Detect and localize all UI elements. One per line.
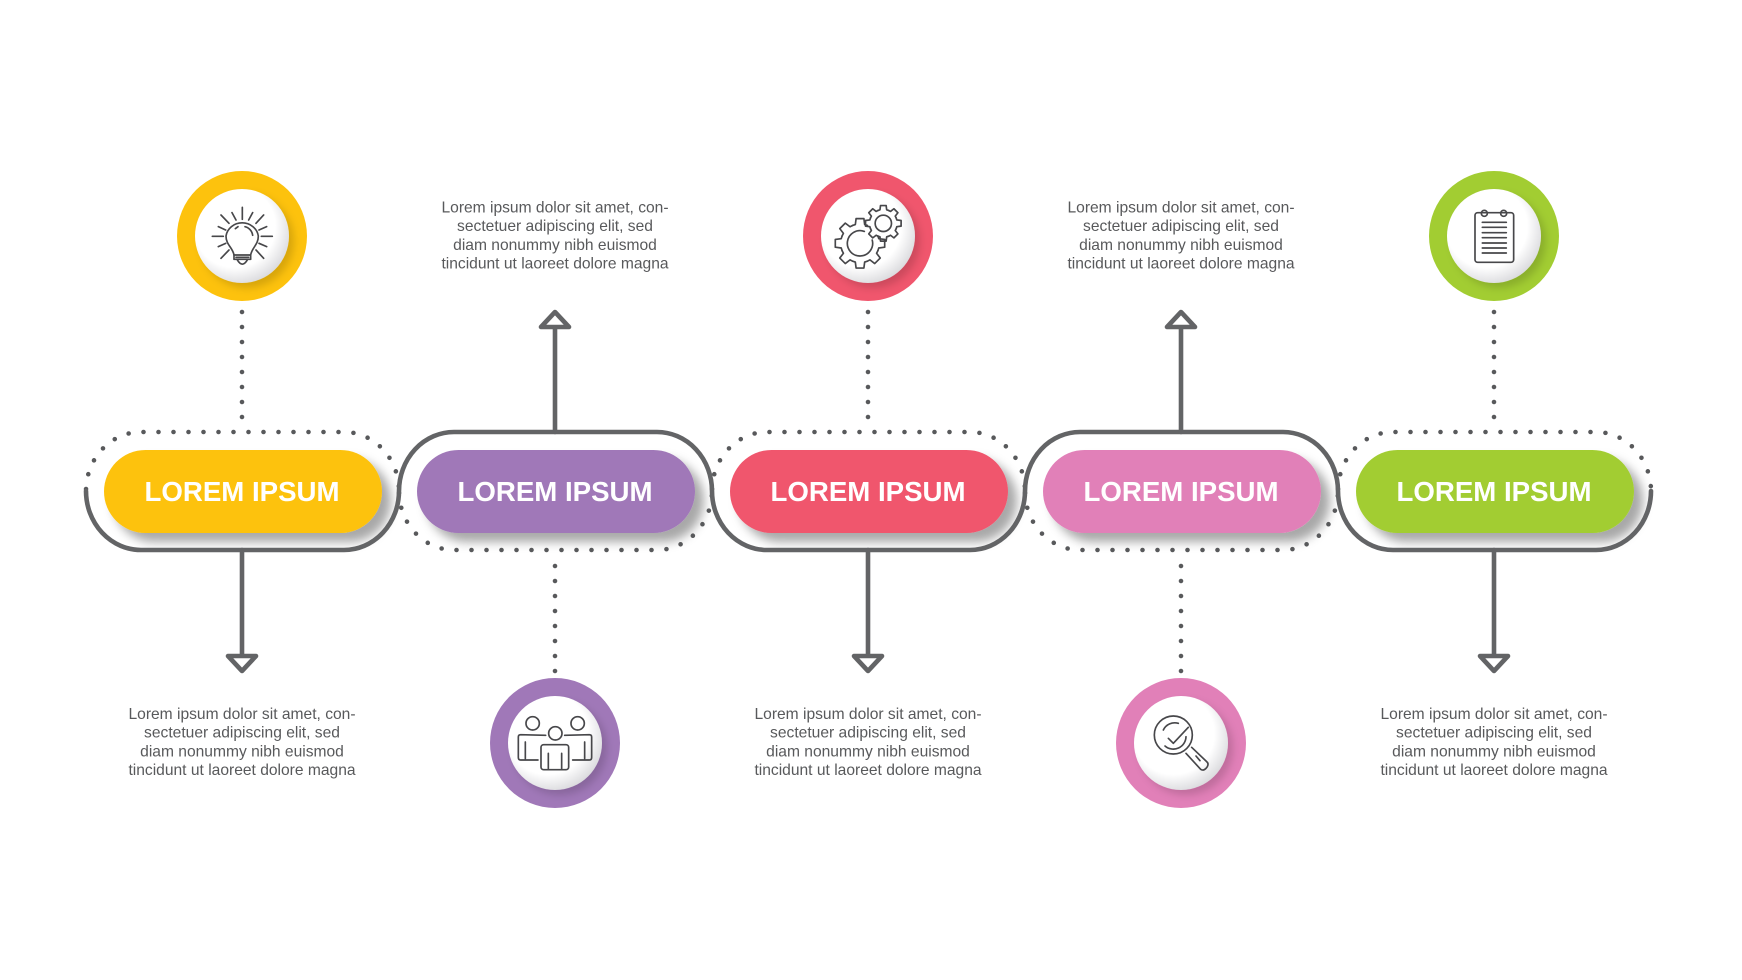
step 3 label pill: LOREM IPSUM: [770, 476, 966, 507]
text block: step 1: tincidunt ut laoreet dolore magna: [128, 762, 356, 779]
text block: step 4: Lorem ipsum dolor sit amet, con-: [1067, 200, 1295, 216]
icon badge: team: [490, 678, 620, 808]
text block: step 2: tincidunt ut laoreet dolore magna: [441, 256, 669, 273]
step 2 label pill: LOREM IPSUM: [458, 476, 652, 507]
text block: step 1: diam nonummy nibh euismod: [140, 743, 344, 760]
text block: step 4: sectetuer adipiscing elit, sed: [1083, 218, 1279, 235]
icon: gears: [835, 206, 901, 268]
connector dots: step 3: [866, 312, 870, 420]
text block: step 1: Lorem ipsum dolor sit amet, con-: [128, 706, 356, 723]
text block: step 3: tincidunt ut laoreet dolore magna: [754, 762, 982, 779]
arrow down: step 3: [854, 550, 882, 671]
connector dots: step 2: [553, 566, 557, 674]
icon badge: gears: [803, 171, 933, 301]
step 4 label pill: LOREM IPSUM: [1084, 476, 1278, 507]
text block: step 3: sectetuer adipiscing elit, sed: [770, 725, 966, 742]
text block: step 5: diam nonummy nibh euismod: [1392, 743, 1596, 760]
arrow down: step 5: [1480, 550, 1508, 671]
connector dots: step 1: [240, 312, 244, 420]
icon badge: light bulb: [177, 171, 307, 301]
text block: step 2: sectetuer adipiscing elit, sed: [457, 218, 653, 235]
arrow down: step 1: [228, 550, 256, 671]
text block: step 5: Lorem ipsum dolor sit amet, con-: [1380, 706, 1608, 723]
step 2 label pill: [417, 450, 695, 533]
step 5 label pill: [1356, 450, 1634, 533]
step 1 label pill: [104, 450, 382, 533]
icon: light bulb: [212, 207, 272, 264]
icon: team of people: [518, 717, 592, 770]
step 5 label pill: LOREM IPSUM: [1396, 476, 1592, 507]
text block: step 5: sectetuer adipiscing elit, sed: [1396, 725, 1592, 742]
arrow up: step 2: [541, 312, 569, 432]
icon: magnifier with check: [1154, 716, 1208, 770]
step 4 label pill: [1043, 450, 1321, 533]
text block: step 4: diam nonummy nibh euismod: [1079, 237, 1283, 254]
step 1 label pill: LOREM IPSUM: [144, 476, 340, 507]
step 3 label pill: [730, 450, 1008, 533]
connector dots: step 5: [1492, 312, 1496, 420]
text block: step 3: diam nonummy nibh euismod: [766, 743, 970, 760]
icon badge: notepad: [1429, 171, 1559, 301]
text block: step 3: Lorem ipsum dolor sit amet, con-: [754, 706, 982, 723]
text block: step 5: tincidunt ut laoreet dolore magna: [1380, 762, 1608, 779]
connector dots: step 4: [1179, 566, 1183, 674]
text block: step 4: tincidunt ut laoreet dolore magna: [1067, 256, 1295, 273]
solid wave line: [86, 432, 1651, 550]
text block: step 2: diam nonummy nibh euismod: [453, 237, 657, 254]
icon: notepad: [1475, 210, 1514, 262]
text block: step 1: sectetuer adipiscing elit, sed: [144, 725, 340, 742]
dotted wave outline: [86, 432, 1651, 550]
icon badge: magnifier: [1116, 678, 1246, 808]
arrow up: step 4: [1167, 312, 1195, 432]
text block: step 2: Lorem ipsum dolor sit amet, con-: [441, 200, 669, 216]
